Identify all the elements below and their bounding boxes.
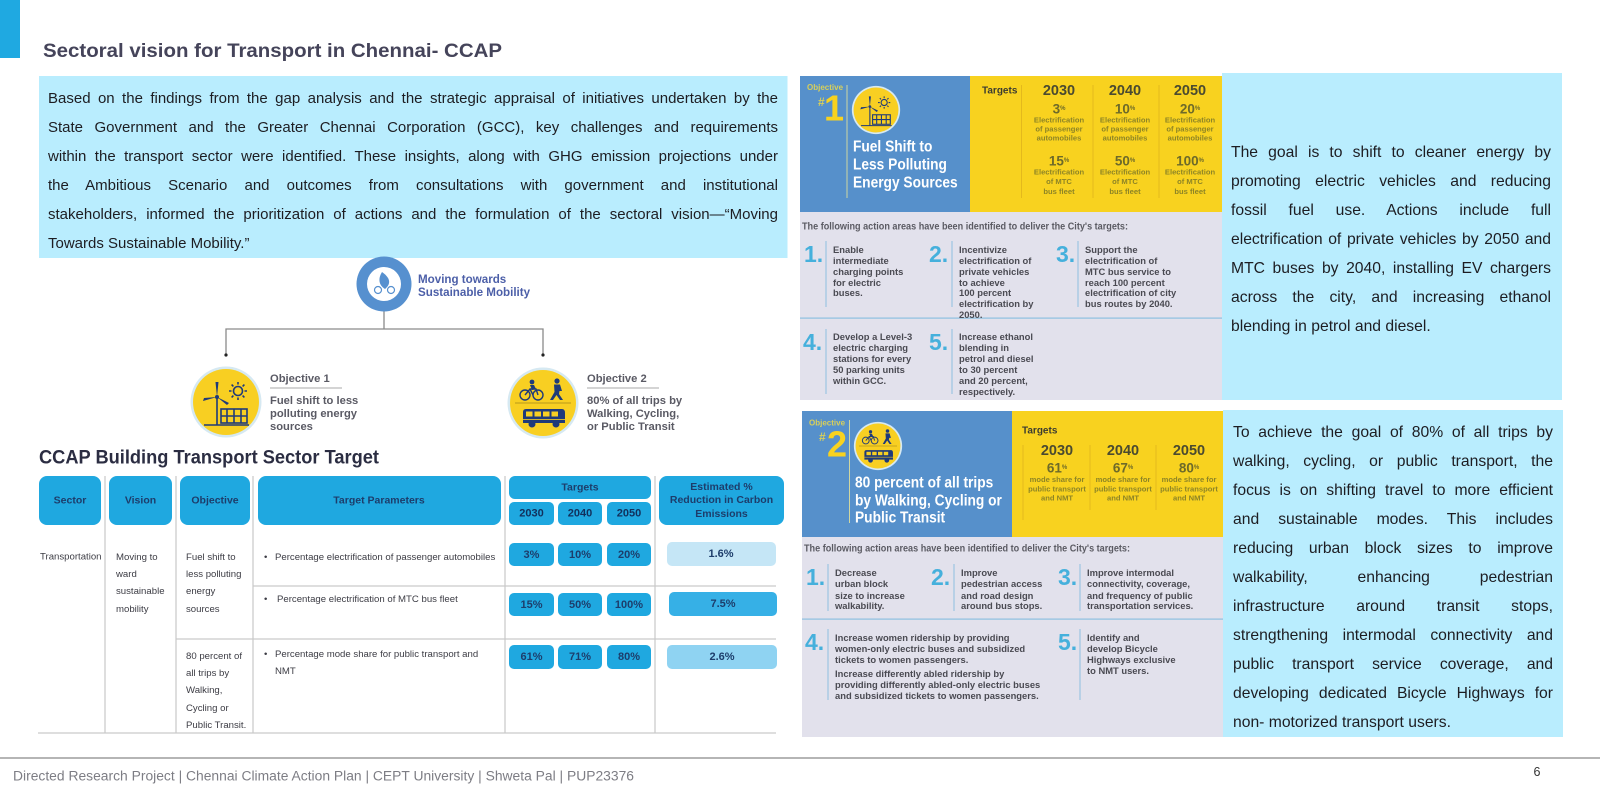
objective 2 explanation text: strengthening intermodal connectivity and bbox=[1233, 627, 1553, 644]
objective 1 explanation text bbox=[1231, 144, 1551, 335]
objective 2 action areas: Improve bbox=[961, 566, 997, 578]
objective 1 explanation text: across the city, and increasing ethanol bbox=[1231, 289, 1551, 306]
objective 1 action areas: The following action areas have been identified to deliver the City's targets: bbox=[802, 222, 1128, 232]
objective 1 action areas: to 30 percent bbox=[959, 364, 1017, 374]
objective 1 yellow targets: 2050 bbox=[1174, 83, 1206, 99]
objective 1 explanation text: electrification of private vehicles by 2050 and bbox=[1231, 231, 1551, 248]
objective 2 action areas: and subsidized tickets to women passengers. bbox=[835, 690, 1039, 700]
objective 1 blue banner bbox=[800, 76, 970, 212]
table grid bbox=[38, 476, 776, 733]
header: target parameters: Target Parameters bbox=[333, 494, 425, 506]
objective 1 action areas: Develop a Level-3 bbox=[833, 330, 912, 342]
icon: cycling walking bus bbox=[508, 368, 578, 438]
objective 2 label: Walking, Cycling, bbox=[587, 408, 679, 420]
objective 2 yellow targets: and NMT bbox=[1173, 493, 1205, 502]
objective 1 explanation text: fossil fuel use. Actions include full bbox=[1231, 202, 1551, 219]
vision cell: Moving to bbox=[116, 552, 158, 562]
parameter 1: • bbox=[264, 552, 267, 562]
row 2 values: 100% bbox=[615, 599, 643, 611]
header: estimated reduction bbox=[659, 476, 784, 525]
row 3 values: 71% bbox=[569, 651, 591, 663]
objective 2 yellow targets: 61% bbox=[1047, 460, 1068, 476]
objective 1 blue banner: 1 bbox=[824, 88, 844, 128]
objective 2 explanation text: reducing urban block sizes to improve bbox=[1233, 540, 1553, 557]
objective 1 action areas: intermediate bbox=[833, 254, 889, 266]
objective 1 yellow targets: Electrification bbox=[1034, 115, 1084, 124]
objective 2 action areas: to NMT users. bbox=[1087, 664, 1149, 676]
objective 2 explanation text: developing dedicated Bicycle Highways for bbox=[1233, 685, 1553, 702]
objective 1 explanation text: The goal is to shift to cleaner energy by bbox=[1231, 144, 1551, 160]
objective 2 action areas: connectivity, coverage, bbox=[1087, 578, 1190, 588]
objective 1 yellow targets: automobiles bbox=[1168, 133, 1212, 142]
objective 2 action areas: 4. bbox=[805, 629, 824, 655]
vision cell: sustainable bbox=[116, 586, 165, 596]
objective 1 action areas: 2. bbox=[929, 241, 948, 267]
intro paragraph bbox=[48, 90, 778, 252]
row 1 values bbox=[509, 542, 776, 566]
objective 2 action areas: transportation services. bbox=[1087, 600, 1193, 610]
objective 2 action areas bbox=[802, 537, 1223, 737]
objective 1 action areas: electric charging bbox=[833, 342, 908, 352]
objective 1 action areas: reach 100 percent bbox=[1085, 276, 1165, 288]
objective 2 explanation text: non- motorized transport users. bbox=[1233, 714, 1451, 731]
objective 1 yellow targets: 15% bbox=[1049, 154, 1070, 168]
objective 2 label bbox=[587, 373, 683, 433]
objective 2 blue banner: Public Transit bbox=[855, 508, 945, 526]
intro paragraph: the Ambitious Scenario and outcomes from consultations with government and institutional bbox=[48, 177, 778, 194]
objective 2 action areas: Highways exclusive bbox=[1087, 654, 1176, 664]
objective 2 yellow targets: mode share for bbox=[1162, 474, 1216, 484]
header: vision: Vision bbox=[125, 494, 156, 506]
objective 2 yellow targets: 2040 bbox=[1107, 443, 1139, 459]
header: objective bbox=[180, 476, 250, 525]
objective 2 blue banner bbox=[802, 411, 1012, 537]
row 1 values: 20% bbox=[618, 549, 640, 561]
objective 2 yellow targets: 80% bbox=[1179, 460, 1200, 476]
objective 1 yellow targets: 2040 bbox=[1109, 83, 1141, 99]
objective 1 yellow targets: Electrification bbox=[1165, 115, 1215, 124]
footer text: Directed Research Project | Chennai Climate Action Plan | CEPT University | Shweta Pal | PUP23376 bbox=[13, 768, 634, 784]
objective 1 action areas bbox=[800, 212, 1222, 400]
objective 1 label: Fuel shift to less bbox=[270, 395, 358, 407]
row 2 values: 50% bbox=[569, 599, 591, 611]
objective 2 explanation text: walking, cycling, or public transport, the bbox=[1233, 453, 1553, 470]
corner accent block bbox=[0, 0, 20, 58]
objective 1 action areas: electrification of bbox=[959, 254, 1032, 266]
objective 2 action areas: Improve intermodal bbox=[1087, 566, 1174, 578]
objective 1 explanation text: promoting electric vehicles and reducing bbox=[1231, 173, 1551, 190]
header: target parameters bbox=[258, 476, 501, 525]
intro paragraph: Based on the findings from the gap analysis and the strategic appraisal of initiatives undertaken by the bbox=[48, 90, 778, 106]
objective 1 action areas: MTC bus service to bbox=[1085, 266, 1171, 276]
objective 1 label bbox=[270, 373, 358, 433]
header: targets bbox=[509, 476, 651, 525]
objective 1 label: Objective 1 bbox=[270, 373, 330, 385]
objective 1 blue banner: Energy Sources bbox=[853, 173, 958, 191]
objective 1 action areas: Enable bbox=[833, 244, 864, 254]
objective 2 action areas: tickets to women passengers. bbox=[835, 654, 968, 664]
objective 2 explanation text: focus is on shifting travel to more efficient bbox=[1233, 482, 1553, 499]
objective 2 yellow targets: 2050 bbox=[1173, 443, 1205, 459]
objective 2 yellow targets bbox=[1012, 411, 1223, 537]
objective 2 yellow targets: 67% bbox=[1113, 460, 1134, 476]
parameter 1: Percentage electrification of passenger automobiles bbox=[275, 552, 495, 562]
objective 1 yellow targets bbox=[970, 76, 1222, 212]
row 3 values: 61% bbox=[520, 651, 543, 663]
objective 1 yellow targets: of passenger bbox=[1166, 124, 1214, 133]
objective 2 action areas: pedestrian access bbox=[961, 578, 1042, 588]
objective 2 blue banner: 2 bbox=[827, 424, 847, 464]
panel: objective 2 infographic bbox=[802, 411, 1223, 737]
objective 1 action areas: Increase ethanol bbox=[959, 330, 1033, 342]
header: targets: 2040 bbox=[568, 508, 592, 520]
objective 2 yellow targets: and NMT bbox=[1107, 493, 1139, 502]
objective 1 yellow targets: Targets bbox=[982, 86, 1018, 96]
row 3 values: 80% bbox=[618, 651, 640, 663]
objective 2 yellow targets: public transport bbox=[1028, 484, 1086, 493]
objective cell 1: sources bbox=[186, 604, 220, 614]
header: estimated reduction: Estimated % bbox=[690, 481, 753, 493]
objective 2 action areas: size to increase bbox=[835, 590, 905, 600]
objective 1 yellow targets: 2030 bbox=[1043, 83, 1075, 99]
objective 1 action areas: electrification of city bbox=[1085, 286, 1177, 298]
objective 1 action areas: electrification of bbox=[1085, 254, 1158, 266]
icon: wind and solar bbox=[190, 366, 262, 438]
objective 1 yellow targets: bus fleet bbox=[1109, 186, 1141, 196]
objective 1 yellow targets: 100% bbox=[1176, 154, 1205, 168]
objective 2 yellow targets: mode share for bbox=[1030, 474, 1084, 484]
objective 1 label: sources bbox=[270, 421, 313, 433]
objective 1 blue banner: # bbox=[818, 95, 825, 109]
header: estimated reduction: Emissions bbox=[695, 508, 748, 520]
objective 1 action areas: buses. bbox=[833, 286, 863, 298]
row 2 values: 15% bbox=[520, 599, 543, 611]
objective 1 action areas: 4. bbox=[803, 329, 822, 355]
objective 1 yellow targets: bus fleet bbox=[1174, 186, 1206, 196]
vision cell: mobility bbox=[116, 604, 149, 614]
objective 1 action areas: for electric bbox=[833, 276, 881, 288]
header: targets: 2030 bbox=[519, 508, 544, 520]
objective 1 yellow targets: 3% bbox=[1053, 102, 1066, 116]
objective 1 action areas: within GCC. bbox=[832, 374, 886, 386]
objective 2 yellow targets: 2030 bbox=[1041, 443, 1073, 459]
objective cell 2: Walking, bbox=[186, 684, 222, 696]
right explanation panel 1 background bbox=[1222, 73, 1562, 400]
vision and objectives diagram bbox=[190, 256, 683, 438]
parameter 2: • bbox=[264, 594, 267, 604]
objective 1 label: polluting energy bbox=[270, 408, 358, 420]
objective 2 explanation text: walkability, enhancing pedestrian bbox=[1233, 569, 1553, 586]
objective 1 action areas: 50 parking units bbox=[833, 364, 905, 374]
objective 1 action areas: stations for every bbox=[833, 352, 912, 364]
objective 2 blue banner: 80 percent of all trips bbox=[855, 473, 993, 491]
parameter 3: • bbox=[264, 648, 267, 660]
objective 1 yellow targets: automobiles bbox=[1037, 133, 1081, 142]
objective 1 yellow targets: Electrification bbox=[1100, 167, 1150, 176]
objective 1 yellow targets: of passenger bbox=[1035, 124, 1083, 133]
objective cell 2: Cycling or bbox=[186, 702, 229, 714]
objective 1 explanation text: blending in petrol and diesel. bbox=[1231, 318, 1431, 335]
right explanation panel 2 background bbox=[1223, 410, 1563, 737]
objective 1 action areas: respectively. bbox=[959, 386, 1015, 396]
objective cell 2: Public Transit. bbox=[186, 720, 246, 730]
row 3 values: 2.6% bbox=[709, 651, 735, 663]
objective 1 action areas: Incentivize bbox=[959, 244, 1007, 254]
objective 2 action areas: Identify and bbox=[1087, 632, 1140, 642]
header: targets: 2050 bbox=[617, 508, 641, 520]
objective 1 action areas: blending in bbox=[959, 342, 1009, 352]
intro paragraph: stakeholders, informed the prioritization of actions and the formulation of the sectoral vision—“Moving bbox=[48, 206, 778, 223]
objective cell 1: less polluting bbox=[186, 568, 241, 580]
objective 1 yellow targets: 10% bbox=[1115, 102, 1136, 116]
objective 2 yellow targets: Targets bbox=[1022, 426, 1058, 436]
objective 2 action areas: The following action areas have been identified to deliver the City's targets: bbox=[804, 544, 1130, 554]
objective 2 blue banner: # bbox=[819, 430, 826, 444]
target table bbox=[38, 476, 784, 733]
objective 1 yellow targets: automobiles bbox=[1103, 133, 1147, 142]
objective 1 explanation text: MTC buses by 2040, installing EV chargers bbox=[1231, 260, 1551, 277]
objective 2 action areas: and road design bbox=[961, 590, 1034, 600]
objective 2 action areas: Increase women ridership by providing bbox=[835, 632, 1010, 642]
objective 1 action areas: electrification by bbox=[959, 298, 1034, 308]
objective 2 action areas: urban block bbox=[835, 578, 889, 588]
sector cell: Transportation bbox=[40, 552, 102, 562]
header: sector bbox=[39, 476, 101, 525]
objective 1 action areas: 100 percent bbox=[959, 286, 1011, 298]
footer rule bbox=[0, 757, 1600, 759]
objective 1 action areas: 2050. bbox=[959, 308, 982, 320]
objective 2 action areas: 2. bbox=[931, 564, 950, 590]
objective 1 action areas: 1. bbox=[804, 241, 823, 267]
objective 2 action areas: walkability. bbox=[834, 600, 884, 610]
row 2 values bbox=[509, 592, 777, 616]
connector lines bbox=[224, 310, 545, 357]
objective 2 action areas: 3. bbox=[1058, 564, 1077, 590]
objective 2 action areas: around bus stops. bbox=[961, 600, 1042, 610]
row 2 values: 7.5% bbox=[710, 598, 736, 610]
objective cell 2: 80 percent of bbox=[186, 650, 242, 662]
header: sector: Sector bbox=[54, 494, 86, 506]
objective 1 action areas: Support the bbox=[1085, 244, 1138, 254]
header: objective: Objective bbox=[191, 494, 239, 506]
objective 2 action areas: develop Bicycle bbox=[1087, 642, 1158, 654]
objective 2 blue banner: by Walking, Cycling or bbox=[855, 491, 1002, 509]
objective 2 explanation text: and sustainable modes. This includes bbox=[1233, 511, 1553, 528]
objective cell 1: energy bbox=[186, 586, 216, 596]
objective 1 yellow targets: bus fleet bbox=[1043, 186, 1075, 196]
row 1 values: 1.6% bbox=[708, 548, 734, 560]
table heading: CCAP Building Transport Sector Target bbox=[39, 448, 380, 468]
header: vision bbox=[109, 476, 172, 525]
objective 2 action areas: Increase differently abled ridership by bbox=[835, 668, 1005, 678]
objective 2 explanation text: To achieve the goal of 80% of all trips by bbox=[1233, 424, 1553, 440]
objective 1 action areas: private vehicles bbox=[959, 266, 1029, 276]
row 1 values: 3% bbox=[524, 549, 540, 561]
objective 2 yellow targets: public transport bbox=[1094, 484, 1152, 493]
objective 1 action areas: 5. bbox=[929, 329, 948, 355]
objective cell 2: all trips by bbox=[186, 668, 229, 678]
header: targets: Targets bbox=[561, 482, 599, 494]
intro panel background bbox=[39, 76, 788, 258]
objective 2 action areas: Decrease bbox=[835, 566, 877, 578]
objective 2 explanation text: public transport service coverage, and bbox=[1233, 656, 1553, 673]
page number: 6 bbox=[1534, 765, 1541, 779]
objective 2 action areas: and frequency of public bbox=[1087, 590, 1193, 600]
parameter 2: Percentage electrification of MTC bus fleet bbox=[277, 594, 458, 604]
title: Sectoral vision for Transport in Chennai- CCAP bbox=[43, 40, 502, 62]
objective 2 blue banner: Objective bbox=[809, 418, 846, 428]
objective 2 explanation text bbox=[1233, 424, 1553, 731]
objective 1 yellow targets: of MTC bbox=[1046, 176, 1072, 186]
objective 2 label: 80% of all trips by bbox=[587, 395, 683, 407]
panel: objective 1 infographic bbox=[800, 76, 1222, 400]
objective 1 blue banner: Objective bbox=[807, 83, 844, 92]
objective 1 action areas: charging points bbox=[833, 266, 903, 276]
objective 2 explanation text: infrastructure around transit stops, bbox=[1233, 598, 1553, 615]
row 1 values: 10% bbox=[569, 549, 591, 561]
vision label: Sustainable Mobility bbox=[418, 286, 531, 298]
objective 1 action areas: to achieve bbox=[959, 276, 1005, 288]
objective 2 label: Objective 2 bbox=[587, 373, 647, 385]
objective 2 yellow targets: and NMT bbox=[1041, 493, 1073, 502]
objective 2 action areas: 5. bbox=[1058, 629, 1077, 655]
objective 2 action areas: 1. bbox=[806, 564, 825, 590]
intro paragraph: State Government and the Greater Chennai Corporation (GCC), key challenges and requirements bbox=[48, 119, 778, 136]
objective 1 action areas: 3. bbox=[1056, 241, 1075, 267]
objective 1 yellow targets: Electrification bbox=[1100, 115, 1150, 124]
intro paragraph: within the transport sector were identified. These insights, along with GHG emission projections under bbox=[48, 148, 778, 165]
vision label: Moving towards bbox=[418, 272, 506, 286]
objective 2 yellow targets: mode share for bbox=[1096, 474, 1150, 484]
objective 2 yellow targets: public transport bbox=[1160, 484, 1218, 493]
objective 2 action areas: women-only electric buses and subsidized bbox=[834, 642, 1025, 654]
objective 1 yellow targets: Electrification bbox=[1165, 167, 1215, 176]
objective 1 action areas: and 20 percent, bbox=[959, 374, 1028, 386]
parameter 3: NMT bbox=[275, 666, 296, 676]
objective 1 yellow targets: 50% bbox=[1115, 154, 1136, 168]
objective 2 label: or Public Transit bbox=[587, 421, 675, 433]
objective 1 yellow targets: of MTC bbox=[1177, 176, 1203, 186]
vision cell: ward bbox=[115, 568, 137, 580]
objective 2 action areas: providing differently abled-only electric buses bbox=[835, 678, 1040, 690]
objective 1 yellow targets: Electrification bbox=[1034, 167, 1084, 176]
objective 1 yellow targets: 20% bbox=[1180, 102, 1201, 116]
objective 1 blue banner: Less Polluting bbox=[853, 155, 947, 173]
objective 1 yellow targets: of MTC bbox=[1112, 176, 1138, 186]
objective 1 action areas: petrol and diesel bbox=[959, 352, 1034, 364]
row 3 values bbox=[509, 645, 777, 669]
objective 1 yellow targets: of passenger bbox=[1101, 124, 1149, 133]
objective 1 action areas: bus routes by 2040. bbox=[1085, 298, 1173, 308]
icon: sustainable mobility bbox=[356, 256, 412, 312]
header: estimated reduction: Reduction in Carbon bbox=[670, 494, 773, 506]
intro paragraph: Towards Sustainable Mobility.” bbox=[48, 235, 249, 252]
objective cell 1: Fuel shift to bbox=[186, 552, 236, 562]
parameter 3: Percentage mode share for public transport and bbox=[275, 648, 478, 660]
objective 1 blue banner: Fuel Shift to bbox=[853, 137, 932, 155]
